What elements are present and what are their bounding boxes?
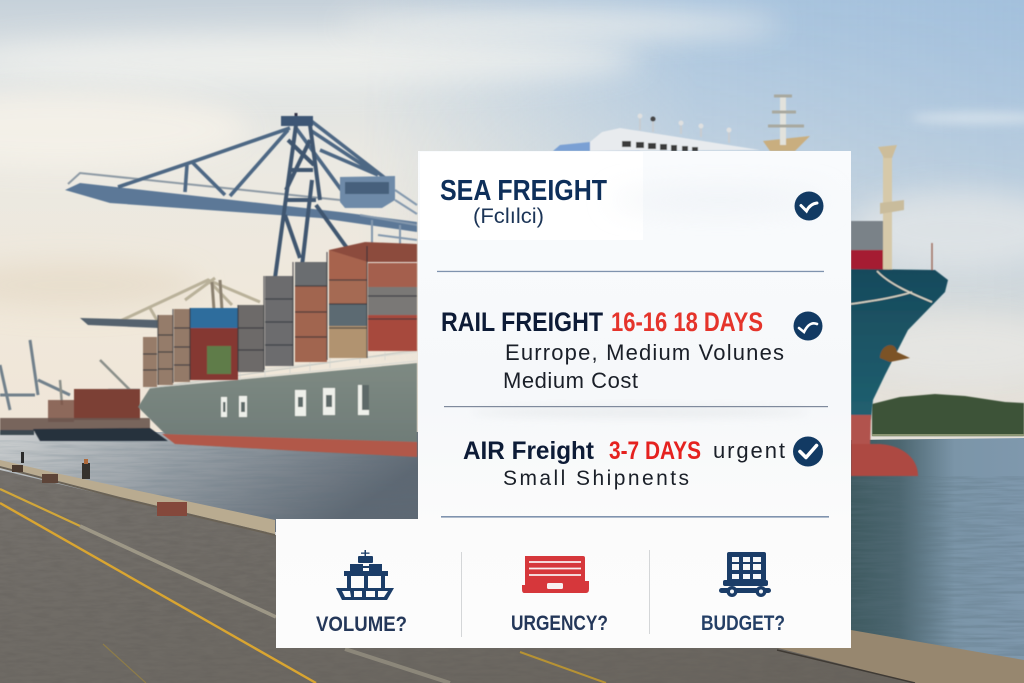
container ship hull <box>138 350 417 457</box>
icon: check sea <box>794 192 824 220</box>
tree line <box>872 394 1024 436</box>
label: urgency: URGENCY? <box>511 612 608 635</box>
icon: check rail <box>794 312 822 340</box>
row: air freight <box>463 436 823 490</box>
details line 1: rail: Eurrope, Medium Volunes <box>505 340 784 365</box>
urgency note: urgent <box>713 438 785 463</box>
main crane <box>65 113 417 278</box>
label: budget: BUDGET? <box>701 612 785 635</box>
heading: air freight: AIR Freight <box>463 437 595 465</box>
row: sea freight <box>440 175 824 228</box>
quay curb <box>0 460 275 536</box>
distant cranes and barge <box>0 340 168 441</box>
rail track <box>0 489 450 683</box>
details line 2: rail: Medium Cost <box>503 368 638 393</box>
heading: rail freight: RAIL FREIGHT <box>441 307 603 337</box>
bollards and blocks <box>12 452 187 516</box>
icon: container ship <box>336 550 394 600</box>
right water <box>851 438 1024 662</box>
heading: sea freight: SEA FREIGHT <box>440 175 607 207</box>
container stacks <box>143 242 417 387</box>
transit time: air: 3-7 DAYS <box>609 437 701 465</box>
row: rail freight <box>441 307 822 393</box>
icon: red pallet <box>522 556 589 593</box>
translucent information panel <box>276 151 851 648</box>
dock ground <box>0 470 1024 683</box>
sky <box>0 0 1024 450</box>
left water <box>0 432 418 532</box>
bottom criteria row <box>316 550 785 637</box>
background crane <box>80 278 260 328</box>
top ship superstructure <box>553 95 810 151</box>
icon: rail wagon <box>719 552 771 597</box>
yellow lane line <box>0 503 606 683</box>
right ship bow <box>851 145 948 476</box>
label: volume: VOLUME? <box>316 613 407 636</box>
transit time: rail: 16-16 18 DAYS <box>611 307 763 337</box>
details: air: Small Shipnents <box>503 467 689 490</box>
icon: check air <box>793 436 823 466</box>
subtext: sea freight: (Fclılci) <box>473 205 544 228</box>
